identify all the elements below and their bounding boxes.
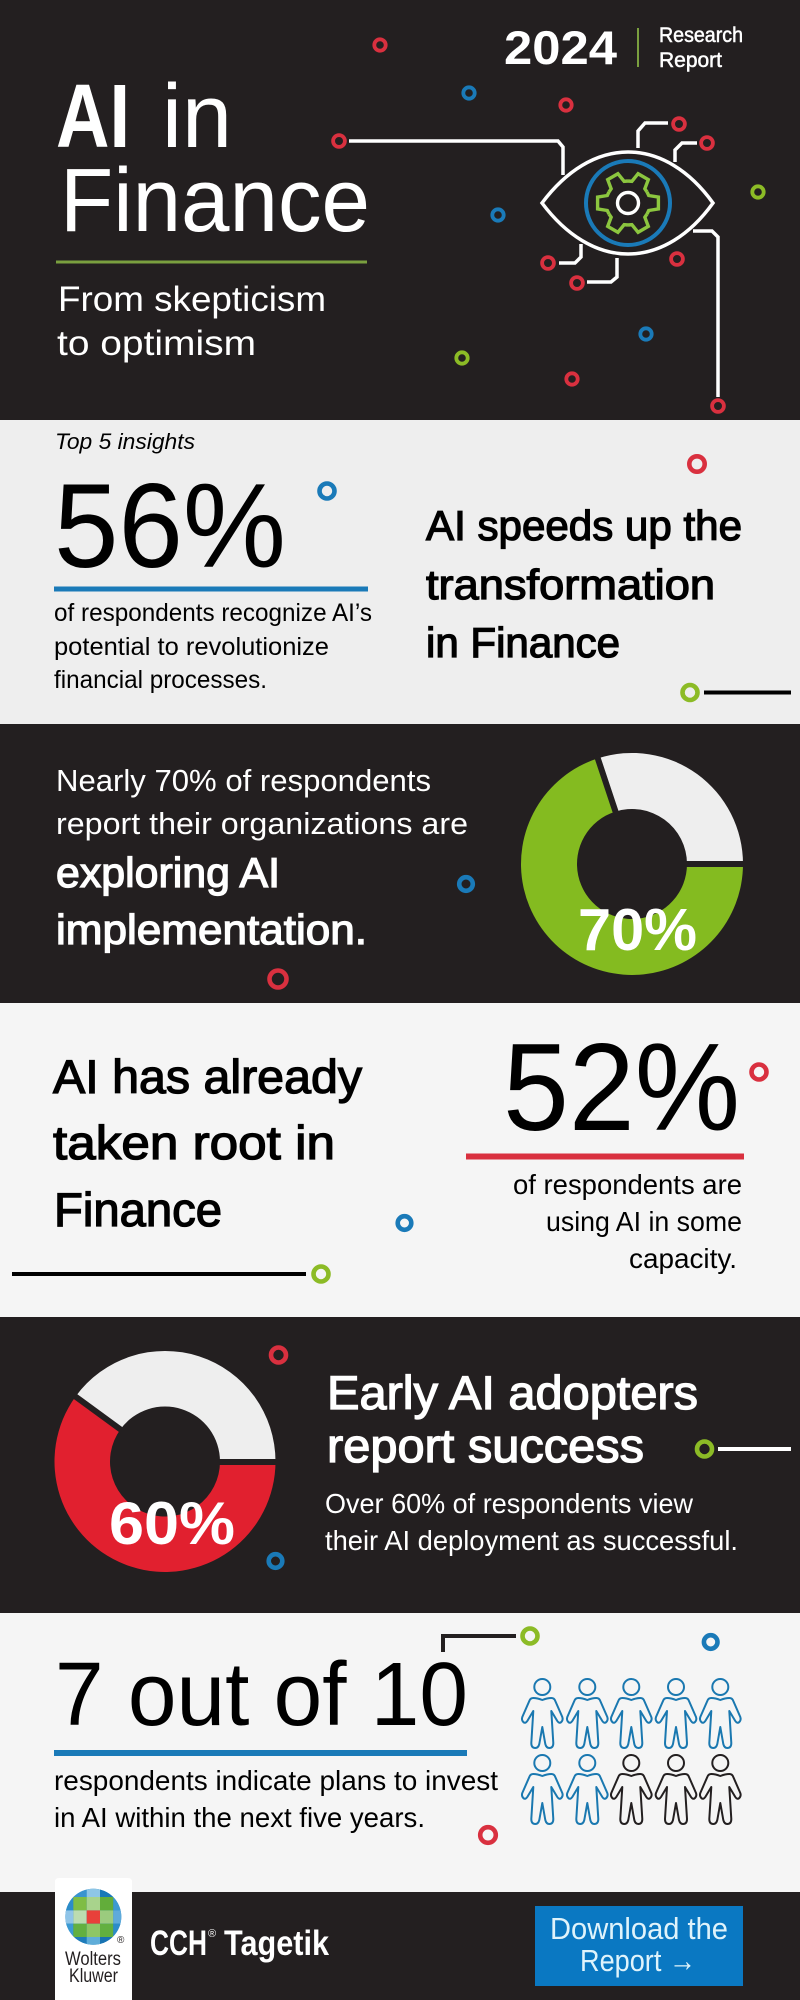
stat description: financial processes. [54,666,267,694]
panel: 7 out of 10 [0,1613,800,1892]
donut chart: 60%: 60% [109,1490,235,1557]
subtitle: to optimism [57,324,256,363]
heading: Early AI adopters [327,1366,698,1419]
accent rings [480,1635,718,1843]
body text: their AI deployment as successful. [325,1525,738,1556]
button: download the report: Download the [550,1911,728,1946]
brand: CCH Tagetik: Tagetik [224,1924,329,1963]
title: AI [56,67,130,167]
panel: footer [55,1878,743,2000]
badge: 2024 research report: Report [659,49,722,72]
brand: CCH Tagetik: ® [208,1928,216,1940]
badge: 2024 research report: 2024 [504,21,617,74]
logo: Wolters Kluwer: Wolters [65,1949,121,1970]
badge: 2024 research report: Research [659,24,743,47]
stat description: of respondents recognize AI’s [54,599,372,627]
title: Finance [60,151,370,251]
donut chart: 70% [521,753,745,975]
body text: report their organizations are [56,806,468,841]
accent rings and line [269,1348,791,1568]
heading [53,1050,363,1236]
accent rings [270,877,473,988]
logo: Wolters Kluwer: ® [117,1935,125,1946]
title: in [162,67,232,167]
brand: CCH Tagetik: CCH [150,1924,207,1963]
panel: hero [0,0,800,420]
subtitle: From skepticism [58,280,326,319]
stat description: in AI within the next five years. [54,1802,425,1833]
stat description [513,1169,742,1274]
stat: 56%: 56% [54,459,286,593]
body text: implementation. [56,906,367,953]
heading: transformation [426,561,715,608]
pictogram: 7 of 10 people [522,1679,741,1824]
panel: exploring AI [0,724,800,1003]
stat description [54,599,372,694]
brand: CCH Tagetik [150,1924,329,1963]
button: download the report: Report → [580,1943,696,1978]
heading [426,502,742,666]
stat description: of respondents are [513,1169,742,1200]
accent rings and line [12,1064,766,1282]
heading: Finance [54,1183,222,1236]
donut chart: 70%: 70% [578,897,697,963]
stat description: potential to revolutionize [54,633,329,661]
heading: in Finance [426,619,620,666]
body text: exploring AI [56,849,280,896]
body text [56,763,468,953]
logo: Wolters Kluwer: Kluwer [69,1966,119,1987]
stat description [54,1765,498,1833]
panel: early adopters [0,1317,800,1613]
panel: insight 56% [0,420,800,724]
heading: AI has already [53,1050,363,1103]
icon: eye with gear and circuit lines [349,123,718,397]
panel: 52% using AI [0,1003,800,1317]
stat: 52%: 52% [503,1019,740,1157]
accent rings and line [320,456,791,700]
heading [327,1366,698,1472]
heading: taken root in [53,1116,335,1169]
stat description: using AI in some [546,1206,742,1237]
body text: Over 60% of respondents view [325,1488,694,1519]
donut chart: 60% [55,1351,277,1572]
stat description: capacity. [629,1243,737,1274]
heading: AI speeds up the [426,502,742,549]
button: download the report [535,1906,743,1986]
badge: 2024 research report [504,21,743,74]
heading: report success [327,1419,644,1472]
decorative node rings [333,39,764,412]
logo: Wolters Kluwer [55,1878,132,2000]
body text [325,1488,738,1556]
stat: 7 out of 10: 7 out of 10 [55,1645,468,1745]
stat description: respondents indicate plans to invest [54,1765,498,1796]
title [56,67,370,251]
connector line with ring [443,1628,538,1652]
label: top 5 insights: Top 5 insights [55,429,195,454]
subtitle [57,280,326,363]
body text: Nearly 70% of respondents [56,763,431,798]
